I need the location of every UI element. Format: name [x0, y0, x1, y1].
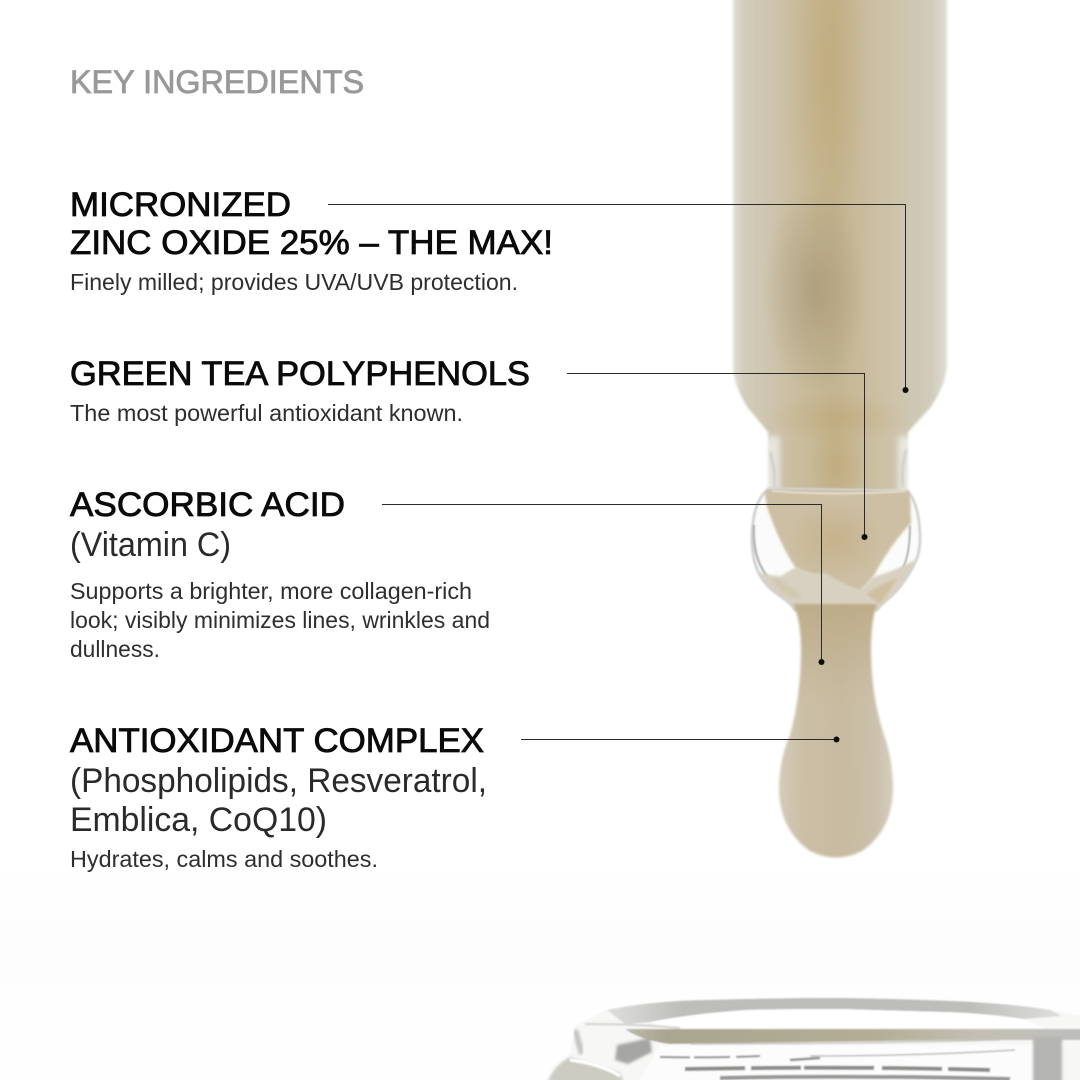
dropper tube — [733, 0, 947, 507]
callout line: zinc oxide — [328, 204, 908, 393]
ingredient: zinc oxide — [70, 186, 553, 295]
serum drop — [779, 604, 893, 858]
subheading — [70, 762, 487, 839]
serum inside bulb — [755, 489, 915, 618]
heading line two: ZINC OXIDE 25% – THE MAX! — [70, 224, 553, 262]
heading: ASCORBIC ACID — [70, 486, 345, 524]
subheading: Emblica, CoQ10) — [70, 801, 327, 839]
rim interior — [650, 1009, 1045, 1028]
heading: GREEN TEA POLYPHENOLS — [70, 355, 530, 393]
right vertical reflection — [1033, 1037, 1062, 1080]
description: Finely milled; provides UVA/UVB protection. — [70, 269, 518, 295]
description: Supports a brighter, more collagen-rich — [70, 578, 472, 604]
olive band — [625, 1029, 1080, 1044]
glass bulb — [752, 489, 920, 610]
description: Hydrates, calms and soothes. — [70, 846, 378, 872]
description — [70, 578, 490, 662]
ingredient: antioxidant complex — [70, 722, 487, 872]
left reflection — [615, 1038, 652, 1064]
description: look; visibly minimizes lines, wrinkles and — [70, 607, 490, 633]
dropper with serum — [733, 0, 947, 858]
ingredient: green tea — [70, 355, 530, 426]
rim band — [607, 998, 1062, 1024]
callout line: antioxidant complex — [521, 736, 840, 742]
glass jar rim — [547, 998, 1080, 1080]
ingredient: ascorbic acid — [70, 486, 490, 662]
neck to bulb seam — [772, 491, 906, 494]
lower body highlight — [640, 1045, 1033, 1080]
subheading: (Vitamin C) — [70, 526, 231, 564]
subheading: (Phospholipids, Resveratrol, — [70, 762, 487, 800]
callout line: green tea — [567, 374, 868, 540]
title: KEY INGREDIENTS — [70, 64, 364, 100]
description: dullness. — [70, 636, 160, 662]
jar body — [573, 1042, 980, 1074]
heading: MICRONIZED — [70, 186, 291, 224]
glass neck highlights — [770, 450, 906, 488]
description: The most powerful antioxidant known. — [70, 400, 463, 426]
heading: ANTIOXIDANT COMPLEX — [70, 722, 484, 760]
callout line: ascorbic acid — [382, 504, 824, 665]
